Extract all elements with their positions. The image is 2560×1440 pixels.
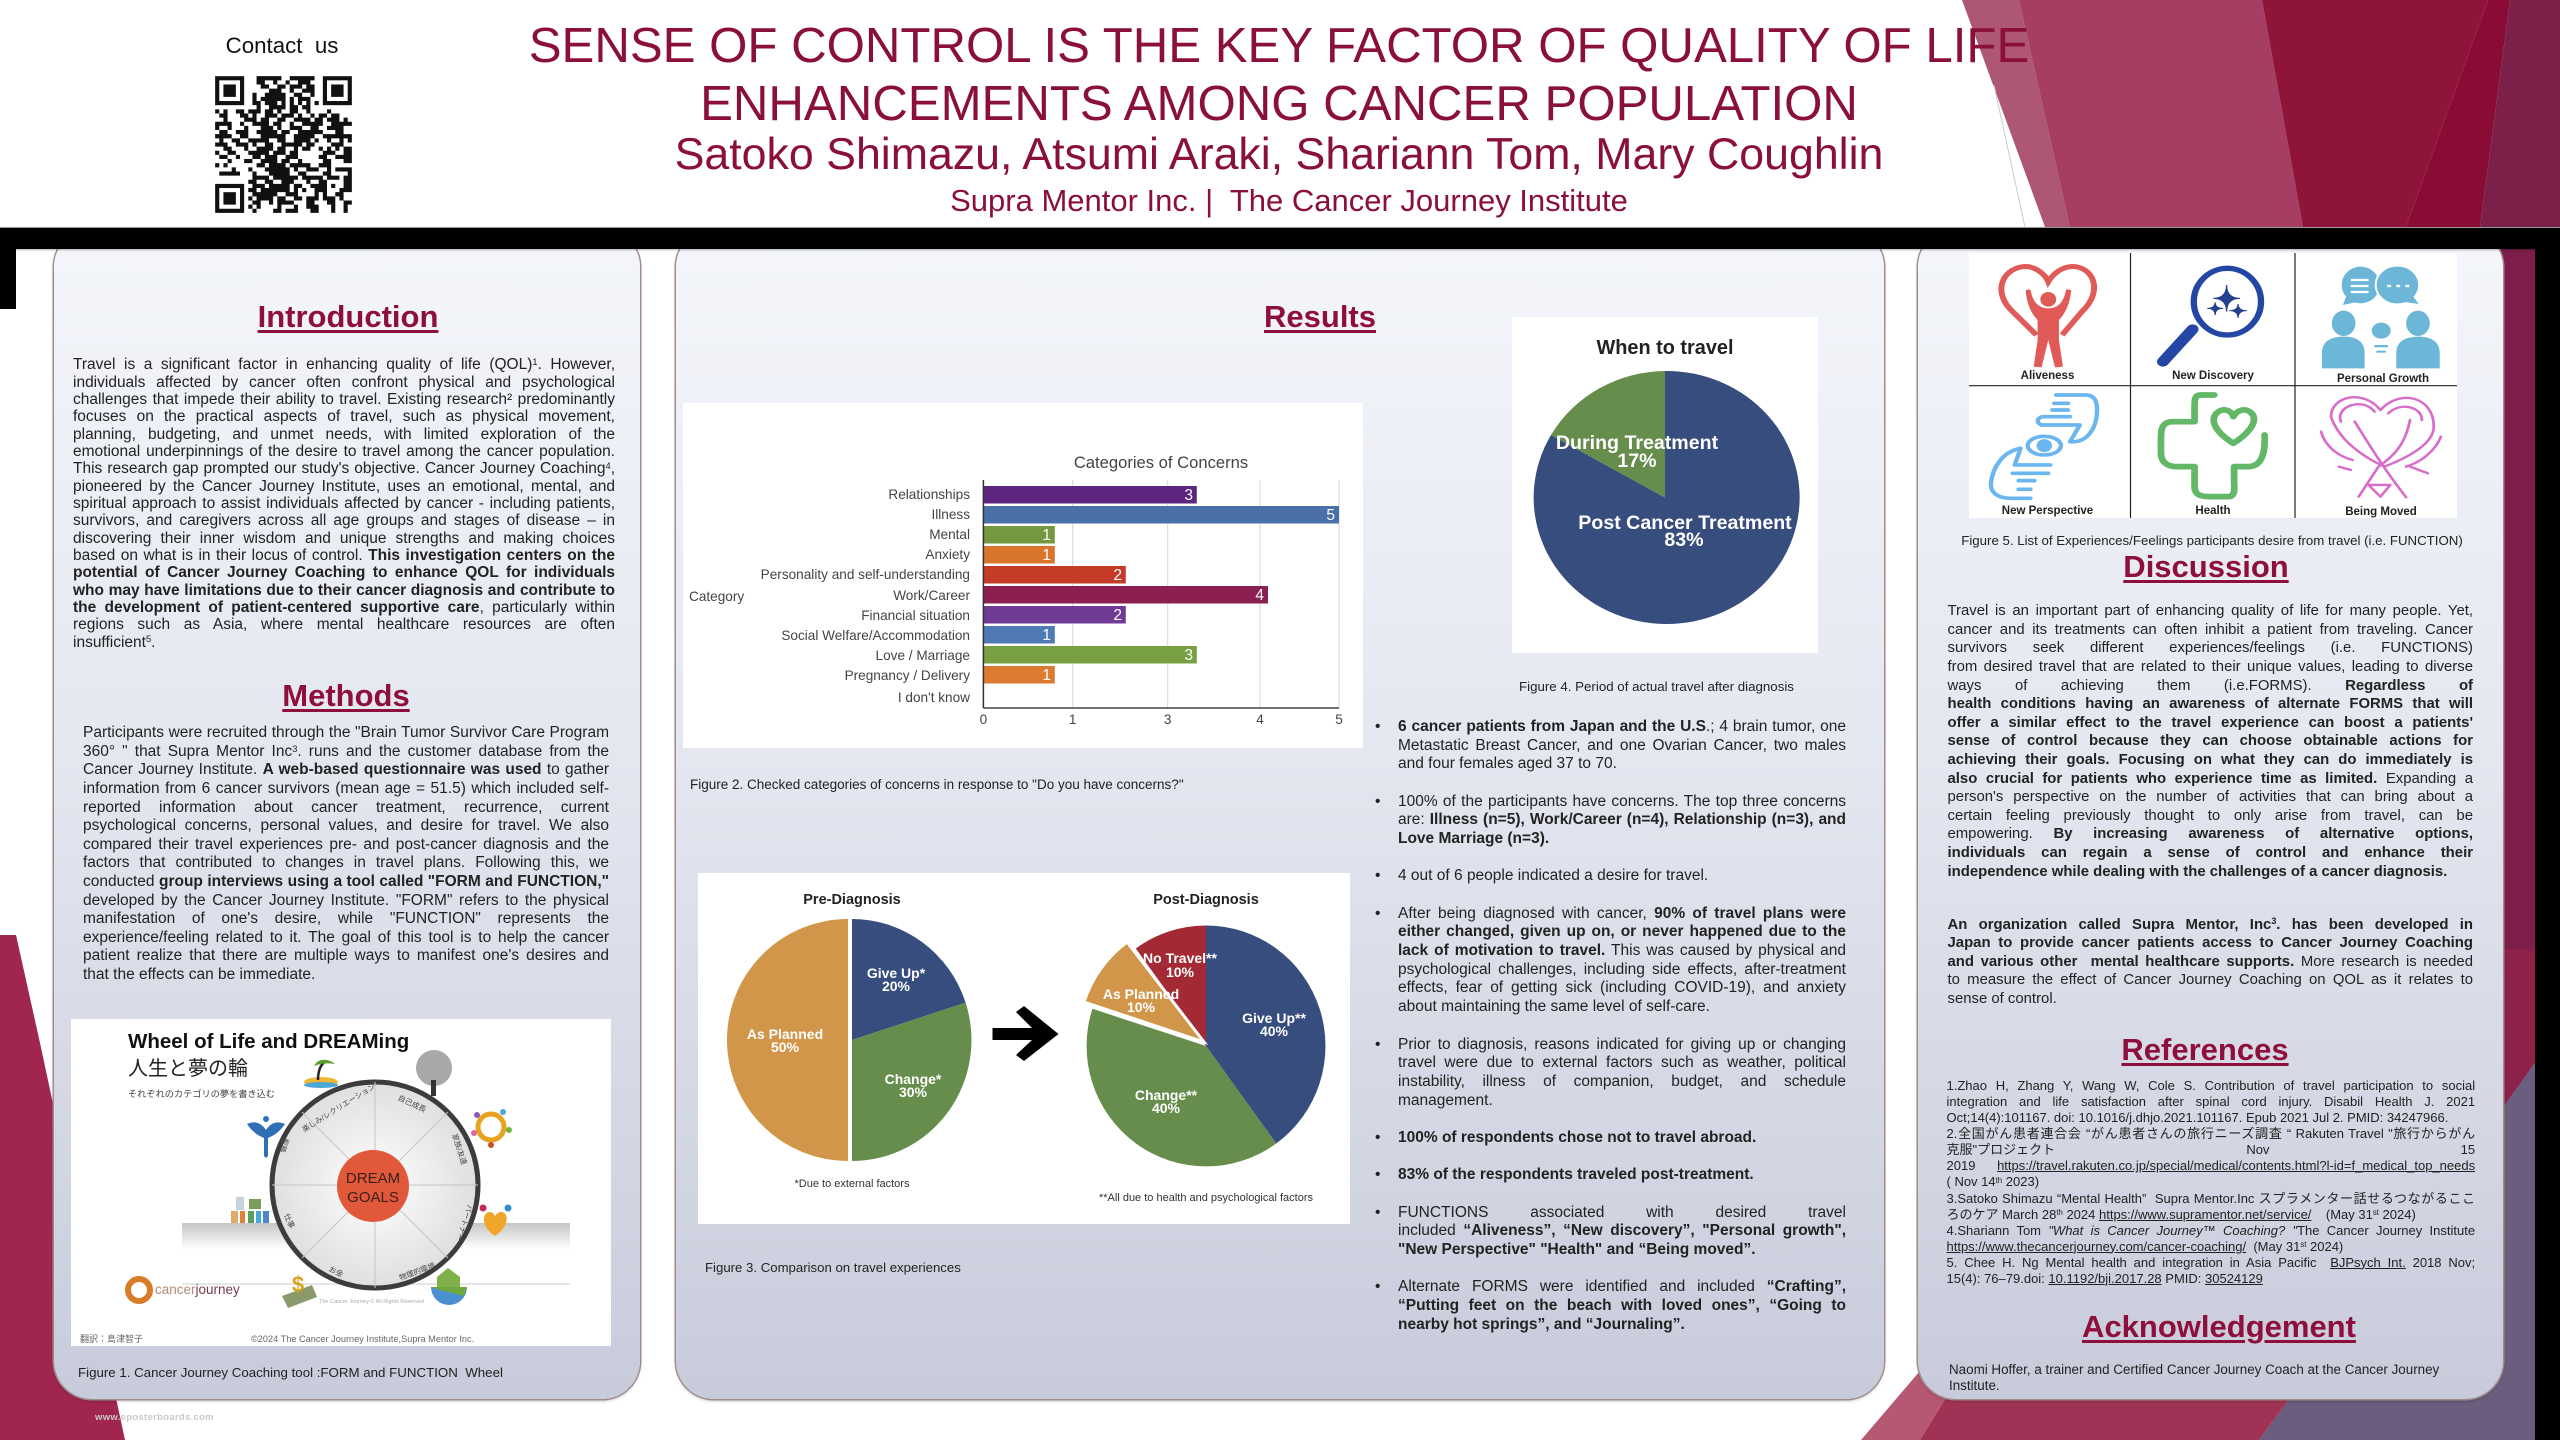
figure 1: wheel of life and dreaming: The Cancer Journey © All Rights Reserved [319,1298,424,1305]
text: acknowledgement [1949,1362,2440,1392]
icon labels: New Perspective [2002,505,2093,517]
figure 4: pie when to travel: Post Cancer Treatment [1578,512,1792,534]
text: supra mentor paragraph: Japan to provide cancer patients access to Cancer Journey Coaching [1948,935,2473,951]
text: results bullet list: about maintaining the same level of self-care. [1398,998,1710,1015]
figure 1: wheel of life and dreaming: Wheel of Life and DREAMing [128,1030,409,1053]
text: references: 2019 https://travel.rakuten.co.jp/special/medical/contents.html?l-id=f_medical_top_needs [1946,1158,2475,1173]
bar values: 2 [1113,567,1122,584]
icon: personal growth [2322,266,2440,368]
figure 5: function icons grid [1969,253,2457,518]
pie: pre-diagnosis: 20% [882,978,911,994]
wheel: 仕事 [282,1212,298,1230]
title line 2: ENHANCEMENTS AMONG CANCER POPULATION [700,76,1858,131]
text: methods: compared their travel experiences pre- and post-cancer diagnosis and the [83,836,609,853]
pie: post-diagnosis: 10% [1166,964,1195,980]
pie: post-diagnosis: Change** [1135,1087,1198,1103]
axis ticks: 4 [1256,712,1264,727]
caption: figure 3: Figure 3. Comparison on travel experiences [705,1260,961,1275]
bar values: 1 [1042,667,1051,684]
bar values: 1 [1042,547,1051,564]
figure 2: bar chart categories of concerns [683,403,1363,748]
website watermark: www.eposterboards.com [95,1412,214,1423]
text: introduction: the development of patient-centered supportive care, particularly within [73,599,615,616]
category labels [761,487,970,705]
pie: post-diagnosis: As Planned [1103,986,1179,1002]
text: references: 15(4): 76–79.doi: 10.1192/bji.2017.28 PMID: 30524129 [1946,1271,2263,1286]
text: supra mentor paragraph [1948,916,2473,1007]
text: discussion: from desired travel that are related to their unique values, leading to diverse [1948,659,2473,675]
wheel [272,1081,478,1288]
panel: discussion, references, acknowledgement [1918,229,2503,1399]
text: discussion: ways of achieving them (i.e.FORMS). Regardless of [1948,678,2473,694]
icon labels: New Discovery [2172,370,2255,382]
text: introduction: challenges that impede their ability to travel. Existing research² predominantly [73,391,615,408]
text: methods: developed by the Cancer Journey Institute. "FORM" refers to the physical [83,892,609,908]
text: results bullet list: • [1375,1204,1380,1221]
figure 1: wheel of life and dreaming: 翻訳：島津智子 [80,1333,143,1344]
text: methods: that the effects can be immediate. [83,966,315,983]
pie: post-diagnosis: Post-Diagnosis [1153,892,1259,908]
bars [983,486,1339,684]
axis ticks: 3 [1164,712,1171,727]
axis ticks [980,712,1343,727]
axis ticks: 5 [1335,712,1343,727]
icon: aliveness [2001,266,2094,367]
black frame left edge [0,249,16,309]
figure 4: pie when to travel: 17% [1617,450,1657,472]
wheel: パートナー [454,1204,474,1242]
pie: pre-diagnosis: 50% [771,1039,800,1055]
bar values: 1 [1042,527,1051,544]
text: supra mentor paragraph: and various other mental healthcare supports. More research is needed [1948,954,2473,970]
text: results bullet list: • [1375,1278,1380,1295]
icon: money: $ [292,1272,304,1297]
text: results bullet list: included “Aliveness”, “New discovery”, "Personal growth", [1398,1222,1846,1239]
text: introduction: regions such as Asia, where mental healthcare resources are often [73,616,615,633]
text: references: Oct;14(4):101167. doi: 10.1016/j.dhjo.2021.101167. Epub 2021 Jul 2. PMID: 34247966. [1946,1110,2448,1125]
icon: money [282,1272,317,1308]
icon: new perspective [1991,395,2097,498]
text: references: 3.Satoko Shimazu “Mental Health” Supra Mentor.Inc スプラメンター話せるつながるここ [1946,1191,2475,1206]
text: references: https://www.thecancerjourney.com/cancer-coaching/ (May 31st 2024) [1946,1239,2343,1254]
pie: post-diagnosis: No Travel** [1143,950,1218,966]
text: introduction: emotional underpinnings of the desire to travel among the cancer population. [73,443,615,460]
icon: tree [416,1050,452,1096]
wheel: お金 [327,1264,346,1279]
text: results bullet list: 83% of the respondents traveled post-treatment. [1398,1166,1754,1183]
icon labels: Aliveness [2021,370,2074,382]
arrow [992,1006,1058,1061]
text: results bullet list: Metastatic Breast Cancer, and one Ovarian Cancer, two males [1398,737,1846,754]
panel: results [676,229,1884,1399]
caption: figure 1: Figure 1. Cancer Journey Coaching tool :FORM and FUNCTION Wheel [78,1365,503,1380]
authors: Satoko Shimazu, Atsumi Araki, Shariann Tom, Mary Coughlin [675,130,1883,179]
icon: house on globe [431,1268,467,1305]
bar values: 4 [1255,587,1264,604]
figure 1: wheel of life and dreaming: ©2024 The Cancer Journey Institute,Supra Mentor Inc. [251,1334,474,1344]
wheel: GOALS [347,1189,399,1206]
text: results bullet list: travel were due to external factors such as weather, political [1398,1054,1846,1071]
icon: caduceus [247,1116,285,1158]
figure 1: wheel of life and dreaming: 人生と夢の輪 [128,1057,248,1080]
text: discussion: individuals can regain a sense of control and enhance their [1948,845,2473,861]
text: results bullet list: 100% of respondents chose not to travel abroad. [1398,1129,1756,1146]
text: results bullet list: • [1375,1129,1380,1146]
wheel: 家族/友達 [450,1132,470,1166]
text: introduction [73,356,615,651]
pie: pre-diagnosis: Change* [885,1071,942,1087]
wheel: 自己成長 [397,1092,428,1114]
text: methods: information from 6 cancer survivors (mean age = 51.5) which included self- [83,780,609,797]
panel: introduction and methods [54,229,640,1399]
text: discussion: independence while dealing with the challenges of a cancer diagnosis. [1948,864,2447,880]
text: introduction: individuals affected by cancer often confront physical and psychological [73,374,615,391]
heading: results: Results [1264,299,1376,334]
text: introduction: focuses on the practical aspects of travel, such as physical movement, [73,408,615,425]
text: results bullet list: are: Illness (n=5), Work/Career (n=4), Relationship (n=3), and [1398,811,1846,828]
category labels: Social Welfare/Accommodation [781,628,970,643]
figure 1: wheel of life and dreaming [71,1019,611,1346]
text: supra mentor paragraph: An organization called Supra Mentor, Inc3. has been developed in [1948,916,2473,932]
text: discussion: Travel is an important part of enhancing quality of life for many people. Yet, [1948,603,2473,619]
text: introduction: Travel is a significant factor in enhancing quality of life (QOL)1. However, [73,356,615,373]
text: results bullet list: 6 cancer patients from Japan and the U.S.; 4 brain tumor, one [1398,718,1846,735]
logo: the cancer journey: cancerjourney [155,1282,240,1297]
text: references: 5. Chee H. Ng Mental health and integration in Asia Pacific BJPsych Int. 2018 Nov; [1946,1255,2475,1270]
category labels: Financial situation [861,608,970,623]
wheel: 物理的環境 [398,1260,437,1282]
text: discussion: sense of control because they can choose obtainable actions for [1948,733,2473,749]
icon: health [2161,395,2265,497]
text: results bullet list [1375,718,1846,1333]
text: discussion [1948,603,2474,880]
heading: introduction: Introduction [258,299,438,334]
text: introduction: pioneered by the Cancer Journey Institute, uses an emotional, mental, and [73,478,615,495]
text: introduction: insufficient5. [73,634,155,651]
category labels: Love / Marriage [876,648,970,663]
text: results bullet list: • [1375,793,1380,810]
text: results bullet list: After being diagnosed with cancer, 90% of travel plans were [1398,905,1846,922]
bar values: 2 [1113,607,1122,624]
axis ticks: 0 [980,712,988,727]
bar values: 5 [1326,507,1335,524]
figure 2: bar chart categories of concerns: Categories of Concerns [1074,453,1248,472]
text: introduction: discovering their inner wisdom and unique strengths and making choices [73,530,615,547]
bar values: 3 [1184,647,1193,664]
text: discussion: person's perspective on the number of activities that can bring about a [1948,789,2473,805]
icon labels: Being Moved [2345,506,2417,518]
pie: pre-diagnosis: Give Up* [867,965,926,981]
bar values [1042,487,1335,684]
text: references: 2.全国がん患者連合会 “がん患者さんの旅行ニーズ調査 “ Rakuten Travel "旅行からがん [1946,1126,2475,1141]
text: results bullet list: and four females aged 37 to 70. [1398,755,1617,772]
text: results bullet list: either changed, given up on, or never happened due to the [1398,923,1846,940]
bar values: 3 [1184,487,1193,504]
pie: pre-diagnosis: Pre-Diagnosis [803,892,901,908]
text: methods: factors that contributed to changes in travel plans. Following this, we [83,854,609,871]
text: references: 1.Zhao H, Zhang Y, Wang W, Cole S. Contribution of travel participation to social [1946,1078,2475,1093]
text: results bullet list: Love Marriage (n=3). [1398,830,1549,847]
text: methods: psychological concerns, personal values, and desire for travel. We also [83,817,609,834]
pie: post-diagnosis: 40% [1260,1023,1289,1039]
text: results bullet list: FUNCTIONS associated with desired travel [1398,1204,1846,1221]
text: results bullet list: 100% of the participants have concerns. The top three concerns [1398,793,1846,810]
logo: the cancer journey [128,1279,240,1301]
icon: new discovery [2163,268,2261,362]
text: introduction: based on what is in their locus of control. This investigation centers on the [73,547,615,564]
pie: post-diagnosis [1084,892,1325,1204]
category labels: Illness [931,507,970,522]
text: methods: manifestation of one's desire, while "FUNCTION" represents the [83,910,609,927]
figure 4: pie when to travel: During Treatment [1556,432,1719,454]
caption: figure 2: Figure 2. Checked categories of concerns in response to "Do you have concerns?" [690,777,1184,792]
figure 1: wheel of life and dreaming: それぞれのカテゴリの夢を書き込む [128,1088,275,1099]
text: introduction: who may have limitations due to their cancer diagnosis and contribute to [73,582,615,599]
text: introduction: spiritual approach to assist individuals affected by cancer - including patients, [73,495,615,512]
text: discussion: empowering. By increasing awareness of alternative options, [1948,826,2473,842]
text: results bullet list: psychological challenges, including side effects, after-treatment [1398,961,1846,978]
text: references: ろのケア March 28th 2024 https://www.supramentor.net/service/ (May 31st 2024) [1946,1207,2416,1222]
text: methods: 360° " that Supra Mentor Inc3. runs and the customer database from the [83,743,609,760]
axis ticks: 1 [1069,712,1076,727]
heading: references: References [2121,1032,2289,1067]
icon labels [2002,370,2429,518]
category labels: Personality and self-understanding [761,567,970,582]
text: results bullet list: • [1375,1036,1380,1053]
text: references: ( Nov 14th 2023) [1946,1174,2039,1189]
text: results bullet list: “Putting feet on the beach with loved ones”, “Going to [1398,1297,1846,1314]
text: methods: reported information about cancer treatment, recurrence, current [83,799,609,816]
text: methods: experience/feeling related to it. The goal of this tool is to help the cancer [83,929,609,946]
text: results bullet list: • [1375,1166,1380,1183]
pie: pre-diagnosis: *Due to external factors [795,1178,910,1190]
wheel: DREAM [346,1170,400,1187]
category labels: Mental [929,527,970,542]
caption: figure 4: Figure 4. Period of actual travel after diagnosis [1519,679,1794,694]
wheel: 楽しみ/レクリエーション [300,1081,377,1134]
figure 3: pie charts comparison [698,873,1350,1224]
text: methods: Cancer Journey Institute. A web-based questionnaire was used to gather [83,761,609,778]
text: supra mentor paragraph: to measure the effect of Cancer Journey Coaching on QOL as it relates to [1948,972,2473,988]
text: supra mentor paragraph: sense of control. [1948,991,2057,1007]
text: introduction: This research gap prompted our study's objective. Cancer Journey Coaching4, [73,460,615,477]
text: results bullet list: • [1375,867,1380,884]
text: results bullet list: management. [1398,1092,1493,1109]
text: references: 4.Shariann Tom "What is Cancer Journey™ Coaching? "The Cancer Journey Institute [1946,1223,2475,1238]
text: discussion: survivors seek different experiences/feelings (i.e. FUNCTIONS) [1948,640,2473,656]
text: contact us: Contact us [226,33,338,58]
bar values: 1 [1042,627,1051,644]
text: introduction: survivors, and caregivers across all age groups and stages of disease – in [73,512,615,529]
text: references [1946,1078,2476,1286]
pie: post-diagnosis: 40% [1152,1100,1181,1116]
pie: post-diagnosis: Give Up** [1242,1010,1306,1026]
figure 4: pie when to travel [1512,317,1818,653]
heading: discussion: Discussion [2123,549,2289,584]
text: discussion: cancer and its treatments can often inhibit a patient from traveling. Cancer [1948,622,2473,638]
figure 4: pie when to travel: 83% [1664,529,1704,551]
text: methods: Participants were recruited through the "Brain Tumor Survivor Care Program [83,724,609,741]
pie: post-diagnosis: 10% [1127,999,1156,1015]
text: introduction: potential of Cancer Journey Coaching to enhance QOL for individuals [73,564,615,581]
icon: being moved [2321,397,2441,497]
pie: pre-diagnosis [727,892,971,1190]
icon: heart family [480,1204,512,1236]
text: results bullet list: lack of motivation to travel. This was caused by physical and [1398,942,1846,959]
text: results bullet list: Prior to diagnosis, reasons indicated for giving up or changing [1398,1036,1846,1053]
category labels: Relationships [888,487,970,502]
caption: figure 5: Figure 5. List of Experiences/Feelings participants desire from travel (i.e. FUNCTION) [1961,533,2463,548]
text: results bullet list: nearby hot springs”, and “Journaling”. [1398,1316,1685,1333]
icon labels: Personal Growth [2337,373,2429,385]
text: references: 克服"プロジェクト [1946,1142,2055,1157]
text: discussion: also crucial for patients who experience time as limited. Expanding a [1948,771,2473,787]
text: results bullet list: instability, illness of companion, budget, and schedule [1398,1073,1846,1090]
heading: acknowledgement: Acknowledgement [2082,1309,2356,1344]
text: methods [83,724,609,983]
text: discussion: health conditions having an awareness of alternate FORMS that will [1948,696,2473,712]
text: acknowledgement: Naomi Hoffer, a trainer and Certified Cancer Journey Coach at the Cancer Journey [1949,1362,2439,1376]
text: results bullet list: • [1375,718,1380,735]
title: SENSE OF CONTROL IS THE KEY FACTOR OF QUALITY OF LIFE [529,18,2029,73]
text: discussion: offer a similar effect to the travel experience can boost a patients' [1948,715,2473,731]
category labels: I don't know [898,690,970,705]
icon: QR code [215,76,352,213]
text: references: 15 [2461,1142,2475,1157]
wheel: 健康 [277,1136,291,1154]
icon: people and objects [231,1197,269,1223]
text: results bullet list: Alternate FORMS were identified and included “Crafting”, [1398,1278,1846,1295]
text: results bullet list: "New Perspective" "Health" and “Being moved”. [1398,1241,1756,1258]
text: discussion: achieving their goals. Focusing on what they can do immediately is [1948,752,2473,768]
icon: palm island [304,1060,338,1088]
icon: people star [471,1109,512,1148]
affiliations: Supra Mentor Inc. | The Cancer Journey Institute [950,182,1628,218]
category labels: Pregnancy / Delivery [845,668,970,683]
figure 2: bar chart categories of concerns: Category [689,589,744,604]
text: results bullet list: effects, fear of getting sick (including COVID-19), and anxiety [1398,979,1846,996]
text: methods: patient realize that there are multiple ways to manifest one's desires and [83,947,609,964]
icon labels: Health [2195,505,2231,517]
pie: post-diagnosis: **All due to health and psychological factors [1099,1192,1314,1204]
pie: pre-diagnosis: 30% [899,1084,928,1100]
text: results bullet list: • [1375,905,1380,922]
text: methods: conducted group interviews using a tool called "FORM and FUNCTION," [83,873,609,890]
pie: pre-diagnosis: As Planned [747,1026,823,1042]
text: acknowledgement: Institute. [1949,1378,2000,1392]
text: discussion: certain feeling previously thought to only arise from travel, can be [1948,808,2473,824]
black frame band [0,227,2560,249]
category labels: Anxiety [925,547,970,562]
figure 4: pie when to travel: When to travel [1596,337,1734,359]
heading: methods: Methods [282,678,410,713]
text: results bullet list: 4 out of 6 people indicated a desire for travel. [1398,867,1708,884]
category labels: Work/Career [893,588,970,603]
text: introduction: planning, budgeting, and unmet needs, with limited exploration of the [73,426,615,443]
text: references: integration and life satisfaction after spinal cord injury. Disabil Health J. 2021 [1946,1094,2475,1109]
text: references: Nov [2246,1142,2269,1157]
